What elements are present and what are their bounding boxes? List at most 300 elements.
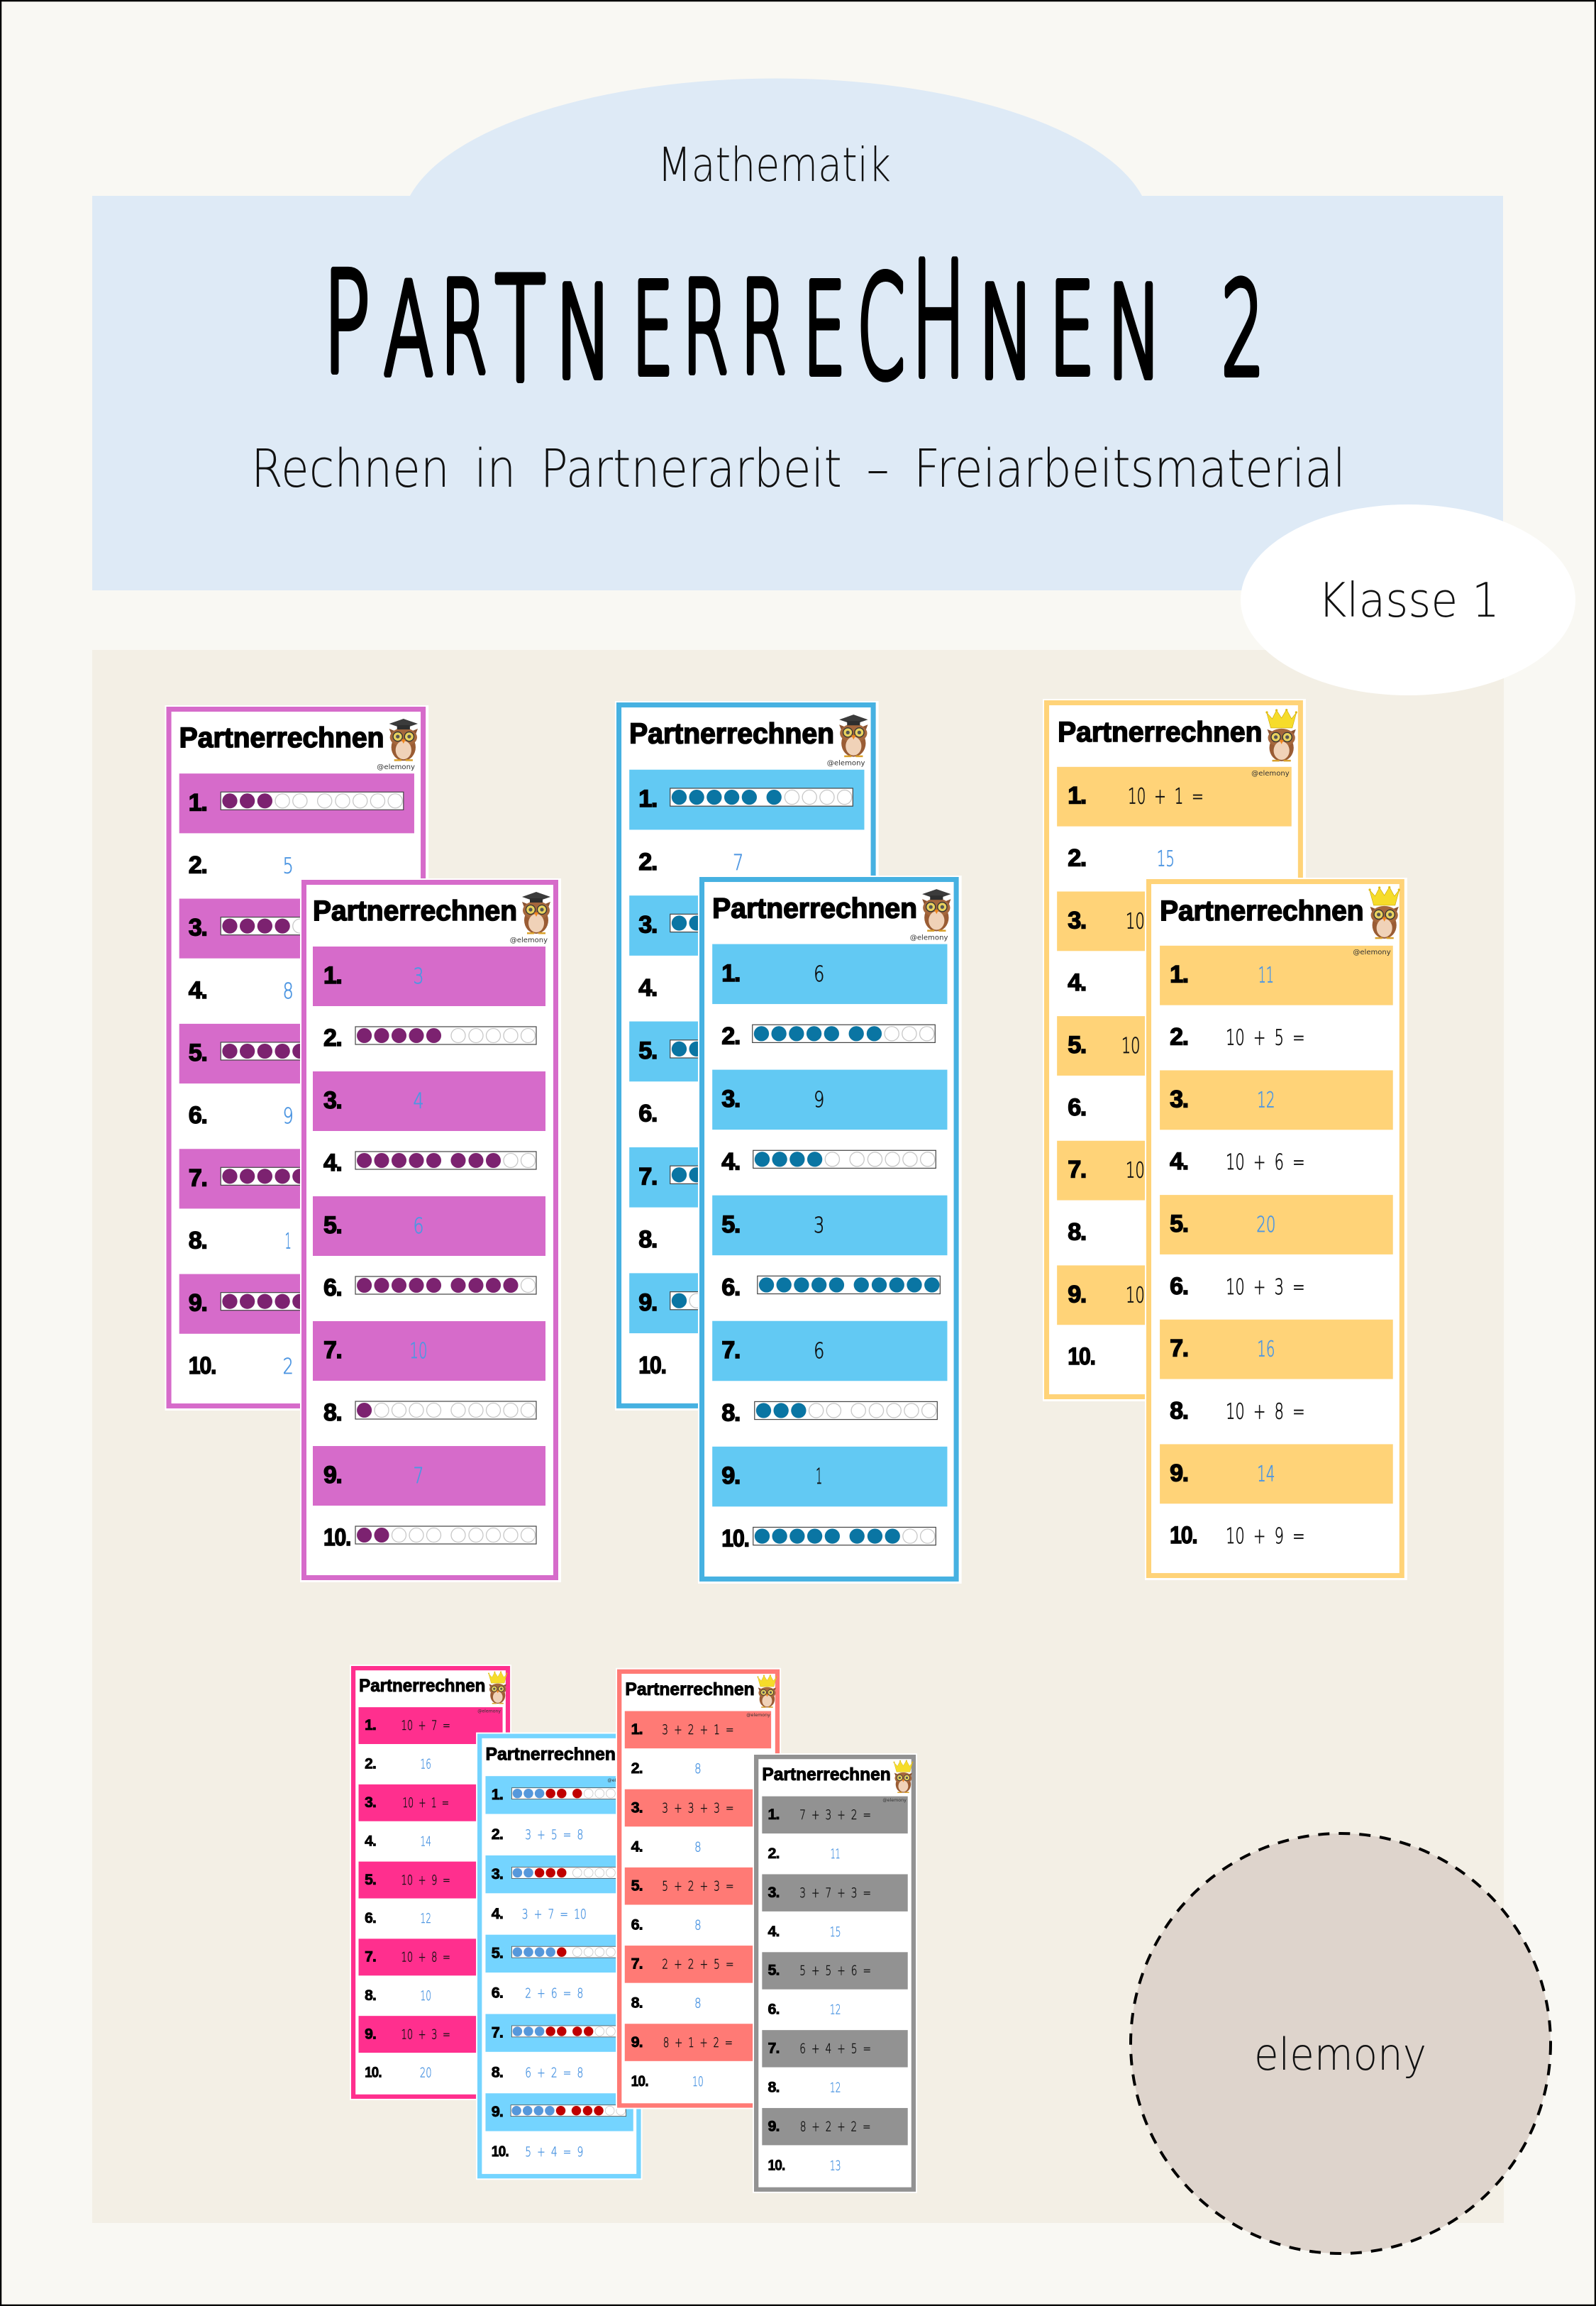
row 3: 3. (768, 1884, 780, 1901)
row 8: 10 (420, 1989, 431, 2004)
row 6: 12 (830, 2003, 841, 2018)
row 8 (365, 1987, 431, 2004)
title: N (1107, 260, 1162, 407)
row 4: 3 + 7 = 10 (522, 1907, 587, 1922)
row 8: 8. (638, 1226, 657, 1253)
row 9: 1 (816, 1464, 822, 1489)
row 10 (189, 1352, 294, 1379)
row 4 (721, 1149, 936, 1175)
row 9: 10 + 3 = (401, 2027, 450, 2042)
card: purple back: 1 (285, 1230, 292, 1254)
credit: @elemony (827, 760, 865, 768)
row 8 (1068, 1219, 1175, 1245)
credit: @elemony (746, 1712, 770, 1718)
row 2: 2. (323, 1025, 341, 1052)
title: C (857, 246, 905, 410)
row 10: 10. (492, 2142, 509, 2160)
row 1: 1. (768, 1806, 780, 1823)
row 9: 9. (721, 1462, 740, 1489)
card: light blue (476, 1733, 643, 2180)
row 8: 8. (1170, 1398, 1188, 1424)
row 1 (179, 773, 414, 833)
row 7 (629, 1147, 864, 1208)
row 10: 10 + 9 = (1226, 1524, 1305, 1549)
icon: owl with crown (1265, 709, 1297, 761)
row 6 (189, 1102, 294, 1129)
row 7: 10 + 6 = (1126, 1159, 1206, 1184)
row 1: 1. (365, 1717, 376, 1733)
row 1 (485, 1776, 633, 1814)
row 9: 9. (365, 2026, 376, 2042)
row 8: 8. (189, 1228, 206, 1254)
row 8: 8. (631, 1995, 643, 2012)
card: blue front (698, 876, 962, 1584)
row 4 (1170, 1148, 1305, 1175)
card title: Partnerrechnen (1160, 895, 1364, 927)
row 8: 18 (1157, 1221, 1175, 1245)
row 7: 2 + 2 + 5 = (662, 1957, 734, 1973)
row 1: 1. (1068, 783, 1086, 810)
row 6: 12 (420, 1911, 431, 1926)
row 1: 3 (413, 964, 424, 989)
row 6: 9 (283, 1104, 294, 1129)
row 4: 8 (283, 979, 294, 1004)
row 8 (189, 1228, 292, 1254)
row 2 (365, 1756, 431, 1772)
row 3: 3. (189, 915, 206, 942)
row 7: 16 (1257, 1337, 1275, 1362)
row 5: 10 + 10 = (1121, 1034, 1210, 1059)
card: pink (350, 1665, 511, 2100)
row 6: 6. (1068, 1094, 1086, 1121)
header panel (92, 196, 1503, 590)
row 2 (768, 1845, 841, 1862)
row 2: 7 (733, 851, 743, 876)
row 4 (189, 977, 294, 1004)
title: E (803, 257, 846, 403)
row 8: 6 + 2 = 8 (525, 2065, 583, 2080)
row 5: 5. (189, 1039, 206, 1066)
row 8: 8. (365, 1987, 376, 2004)
title: R (682, 255, 728, 402)
row 7: 7. (721, 1337, 740, 1364)
row 4 (492, 1904, 587, 1922)
icon: owl with crown (619, 1739, 638, 1772)
row 7 (762, 2030, 908, 2068)
row 1 (313, 947, 545, 1006)
credit: @elemony (1251, 770, 1290, 778)
title: A (384, 257, 433, 404)
row 1 (359, 1707, 503, 1744)
row 10 (1170, 1522, 1305, 1549)
credit: @elemony (510, 937, 548, 944)
row 8: 8. (768, 2079, 780, 2095)
credit: @elemony (910, 934, 948, 942)
row 7: 6 (814, 1339, 824, 1364)
subtitle: Rechnen in Partnerarbeit – Freiarbeitsmaterial (251, 438, 1346, 500)
row 4: 4. (1068, 969, 1086, 996)
row 4: 4. (492, 1904, 503, 1922)
title: E (1049, 257, 1095, 403)
row 6: 6. (768, 2001, 780, 2018)
row 2: 2. (492, 1825, 503, 1843)
row 6 (638, 1100, 747, 1127)
title: R (440, 255, 487, 402)
icon: owl with cap (922, 889, 951, 932)
row 7: 7. (638, 1163, 657, 1190)
row 7 (1160, 1320, 1393, 1379)
credit: @elemony (1353, 949, 1391, 956)
row 3 (179, 899, 414, 959)
row 2: 15 (1157, 847, 1175, 871)
row 9: 9. (189, 1290, 206, 1317)
row 5: 6 (413, 1214, 424, 1239)
row 1 (625, 1711, 771, 1748)
row 6: 6. (1170, 1273, 1188, 1300)
row 1: 1. (189, 789, 206, 816)
row 4: 10 + 6 = (1226, 1150, 1305, 1175)
row 2: 3 + 5 = 8 (525, 1827, 583, 1843)
row 10: 19 (1157, 1345, 1175, 1370)
row 6: 6. (631, 1916, 643, 1933)
row 3: 3. (323, 1087, 341, 1114)
row 10: 10. (631, 2073, 648, 2090)
row 7: 7. (1170, 1335, 1188, 1362)
lower beige panel (92, 650, 1504, 2223)
icon: owl with crown (893, 1760, 913, 1793)
row 5: 5. (768, 1962, 780, 1979)
icon: owl with cap (522, 892, 550, 934)
card: yellow front (1145, 878, 1407, 1580)
row 3 (1160, 1070, 1393, 1130)
row 3: 3 + 3 + 3 = (662, 1800, 734, 1816)
row 5: 10 + 9 = (401, 1873, 450, 1888)
row 2: 2. (1170, 1024, 1188, 1051)
row 9 (762, 2108, 908, 2145)
card: gray (753, 1753, 917, 2193)
row 8 (768, 2079, 841, 2095)
row 7: 7. (1068, 1157, 1086, 1184)
row 1: 10 + 1 = (1128, 785, 1204, 810)
row 5 (629, 1022, 864, 1081)
row 3: 3. (365, 1794, 376, 1811)
row 7 (712, 1321, 947, 1381)
card: blue back (615, 701, 879, 1411)
row 5 (179, 1024, 414, 1083)
row 2 (492, 1825, 583, 1843)
row 10: 20 (420, 2066, 432, 2081)
row 3: 3. (1170, 1086, 1188, 1113)
row 6: 6. (323, 1274, 341, 1301)
row 4: 15 (830, 1925, 841, 1940)
row 9 (1160, 1444, 1393, 1504)
row 10 (638, 1352, 743, 1379)
row 1: 1. (631, 1721, 643, 1738)
row 3 (1057, 891, 1292, 951)
row 8 (638, 1226, 743, 1253)
row 2: 10 + 5 = (1226, 1026, 1305, 1051)
row 7: 6 + 4 + 5 = (799, 2042, 871, 2057)
row 9 (629, 1273, 864, 1333)
row 10: 5 + 4 = 9 (525, 2144, 583, 2160)
row 9 (625, 2024, 771, 2061)
row 2: 2. (365, 1756, 376, 1772)
row 8 (1170, 1398, 1305, 1424)
row 5 (1160, 1195, 1393, 1254)
row 6: 10 (729, 1103, 747, 1127)
row 1 (1057, 767, 1292, 827)
row 10: 10. (638, 1352, 666, 1379)
row 2 (721, 1022, 935, 1049)
row 3 (712, 1070, 947, 1130)
row 1: 7 + 3 + 2 = (799, 1808, 871, 1823)
row 2 (638, 849, 743, 876)
row 6: 6. (189, 1102, 206, 1129)
row 10: 10 (692, 2074, 704, 2090)
row 7: 7. (189, 1164, 206, 1191)
row 3: 4 (413, 1089, 424, 1114)
row 5 (1057, 1016, 1292, 1076)
row 10 (323, 1524, 536, 1551)
row 2: 2. (768, 1845, 780, 1862)
row 4 (768, 1923, 841, 1940)
brand badge: elemony (1254, 2029, 1426, 2080)
row 5: 5. (638, 1037, 657, 1064)
row 8: 8. (721, 1400, 740, 1427)
credit: @elemony (477, 1709, 501, 1714)
row 2: 2. (721, 1022, 740, 1049)
row 9: 10 + 4 = (1126, 1283, 1206, 1308)
row 6 (492, 1984, 583, 2002)
row 8: 3 (733, 1228, 743, 1253)
row 9: 9. (323, 1462, 341, 1489)
card: yellow back (1043, 699, 1306, 1401)
row 9: 9. (631, 2034, 643, 2051)
row 6: 6. (365, 1910, 376, 1926)
row 6: 8 (694, 1918, 702, 1933)
row 9: 9. (1170, 1460, 1188, 1486)
row 10 (721, 1526, 936, 1552)
row 5 (712, 1196, 947, 1255)
row 4: 4. (323, 1149, 341, 1176)
row 6 (1170, 1273, 1305, 1300)
row 9: 7 (413, 1464, 424, 1489)
credit: @elemony (377, 763, 415, 771)
row 10: 10. (365, 2065, 382, 2081)
row 5 (313, 1196, 545, 1256)
row 2 (1068, 845, 1175, 871)
row 4: 16 (1157, 971, 1175, 996)
card: purple back (165, 705, 428, 1411)
row 7 (625, 1946, 771, 1983)
row 4: 4. (768, 1923, 780, 1940)
credit: @elemony (882, 1797, 907, 1803)
row 4 (638, 974, 743, 1001)
title: 2 (1221, 256, 1264, 404)
row 4: 4 (733, 976, 743, 1001)
row 2: 11 (831, 1847, 841, 1862)
row 8: 8. (1068, 1219, 1086, 1245)
row 3: 9 (814, 1088, 824, 1113)
row 10: 10. (1170, 1522, 1197, 1549)
row 5 (485, 1935, 633, 1973)
row 1: 1. (638, 785, 657, 812)
row 10 (768, 2156, 841, 2173)
row 8: 10 + 8 = (1226, 1400, 1305, 1424)
row 7 (359, 1938, 503, 1975)
header dome (410, 79, 1142, 196)
row 4: 4. (189, 977, 206, 1004)
row 10 (1068, 1343, 1175, 1370)
grade badge (1241, 504, 1575, 695)
title: H (911, 228, 965, 413)
row 6: 13 (1157, 1096, 1175, 1121)
card title: Partnerrechnen (712, 891, 917, 924)
row 1: 6 (814, 962, 824, 987)
row 9: 8 + 1 + 2 = (663, 2035, 733, 2051)
row 1: 1. (323, 962, 341, 989)
row 6 (631, 1916, 702, 1933)
row 3: 3. (1068, 907, 1086, 934)
title: P (323, 243, 370, 404)
row 5: 5 + 5 + 6 = (799, 1964, 871, 1979)
row 8: 8. (323, 1399, 341, 1426)
row 10 (492, 2142, 583, 2160)
row 10: 8 (733, 1355, 743, 1379)
row 6: 6. (492, 1984, 503, 2002)
row 5: 5. (631, 1877, 643, 1894)
row 7: 7. (631, 1955, 643, 1973)
row 1: 11 (1258, 964, 1274, 988)
card title: Partnerrechnen (313, 895, 517, 927)
card title: Partnerrechnen (629, 717, 834, 749)
row 3: 3. (638, 912, 657, 939)
title: T (495, 248, 545, 414)
row 4: 4. (631, 1838, 643, 1855)
row 2: 8 (694, 1761, 702, 1777)
row 7: 10 + 8 = (401, 1951, 450, 1965)
row 7: 7. (365, 1949, 376, 1965)
icon: owl with crown (757, 1675, 777, 1708)
row 9: 9. (638, 1289, 657, 1316)
row 5: 5. (492, 1944, 503, 1962)
card title: Partnerrechnen (359, 1677, 485, 1696)
row 5: 20 (1256, 1213, 1275, 1237)
row 7: 7. (323, 1337, 341, 1364)
row 5: 5. (721, 1211, 740, 1238)
row 9: 9. (1068, 1281, 1086, 1308)
row 4 (323, 1149, 536, 1176)
icon: owl with cap (839, 715, 868, 757)
row 5 (762, 1952, 908, 1990)
row 6: 6. (721, 1274, 740, 1301)
title: R (741, 255, 787, 402)
row 7 (313, 1321, 545, 1381)
row 5: 5. (1170, 1210, 1188, 1237)
row 2 (1170, 1024, 1305, 1051)
row 9 (313, 1446, 545, 1506)
row 6 (365, 1910, 431, 1926)
row 9: 9. (768, 2117, 780, 2134)
row 9 (485, 2093, 633, 2131)
row 8 (492, 2063, 583, 2080)
title: E (632, 257, 673, 403)
subject label: Mathematik (658, 138, 891, 192)
row 9 (179, 1274, 414, 1334)
row 1: 1. (721, 960, 740, 987)
row 7 (179, 1149, 414, 1208)
row 8: 12 (830, 2081, 841, 2095)
row 2: 2. (638, 849, 657, 876)
row 1: 10 + 7 = (401, 1719, 450, 1733)
row 9: 8 + 2 + 2 = (800, 2119, 870, 2134)
row 7 (1057, 1141, 1292, 1201)
row 10: 10. (189, 1352, 216, 1379)
grade badge: Klasse 1 (1318, 573, 1500, 628)
row 4 (1068, 969, 1175, 996)
row 3 (629, 895, 864, 956)
row 3 (625, 1789, 771, 1826)
card title: Partnerrechnen (1058, 716, 1262, 748)
row 10: 2 (283, 1355, 294, 1379)
row 7: 7. (768, 2040, 780, 2057)
row 1 (1160, 946, 1393, 1005)
row 8 (721, 1400, 937, 1427)
row 5: 5. (365, 1872, 376, 1888)
row 1 (629, 770, 864, 829)
brand badge (1131, 1833, 1551, 2253)
row 5: 3 (814, 1213, 824, 1238)
row 3 (313, 1071, 545, 1131)
row 3: 3. (721, 1086, 740, 1113)
icon: owl with cap (389, 719, 418, 761)
row 10: 13 (830, 2158, 841, 2173)
row 6 (768, 2001, 841, 2018)
row 6: 10 + 3 = (1226, 1275, 1305, 1300)
row 6 (1068, 1094, 1175, 1121)
card: salmon (616, 1668, 781, 2109)
row 2 (631, 1760, 702, 1777)
row 6: 2 + 6 = 8 (525, 1986, 583, 2002)
icon: owl with crown (1368, 886, 1400, 939)
card title: Partnerrechnen (179, 722, 384, 754)
row 8 (323, 1399, 536, 1426)
row 2: 2. (189, 852, 206, 878)
icon: owl with crown (488, 1671, 507, 1704)
row 5: 5 + 2 + 3 = (662, 1879, 734, 1894)
credit: @elemony (607, 1777, 631, 1783)
row 4: 8 (694, 1839, 702, 1855)
row 9 (359, 2016, 503, 2053)
row 1 (762, 1797, 908, 1833)
row 7: 7. (492, 2024, 503, 2041)
card title: Partnerrechnen (625, 1679, 755, 1699)
row 2 (189, 852, 294, 878)
row 1: 3 + 2 + 1 = (662, 1722, 734, 1738)
row 2: 2. (1068, 845, 1086, 871)
row 8: 8 (694, 1996, 702, 2012)
row 10: 10. (768, 2156, 785, 2173)
row 3 (485, 1855, 633, 1893)
row 6 (721, 1274, 940, 1301)
row 1 (712, 944, 947, 1004)
row 8: 8. (492, 2063, 503, 2080)
row 5 (359, 1862, 503, 1899)
row 4: 4. (721, 1149, 740, 1175)
row 8 (631, 1995, 702, 2012)
row 2 (323, 1025, 536, 1052)
row 4: 4. (1170, 1148, 1188, 1175)
